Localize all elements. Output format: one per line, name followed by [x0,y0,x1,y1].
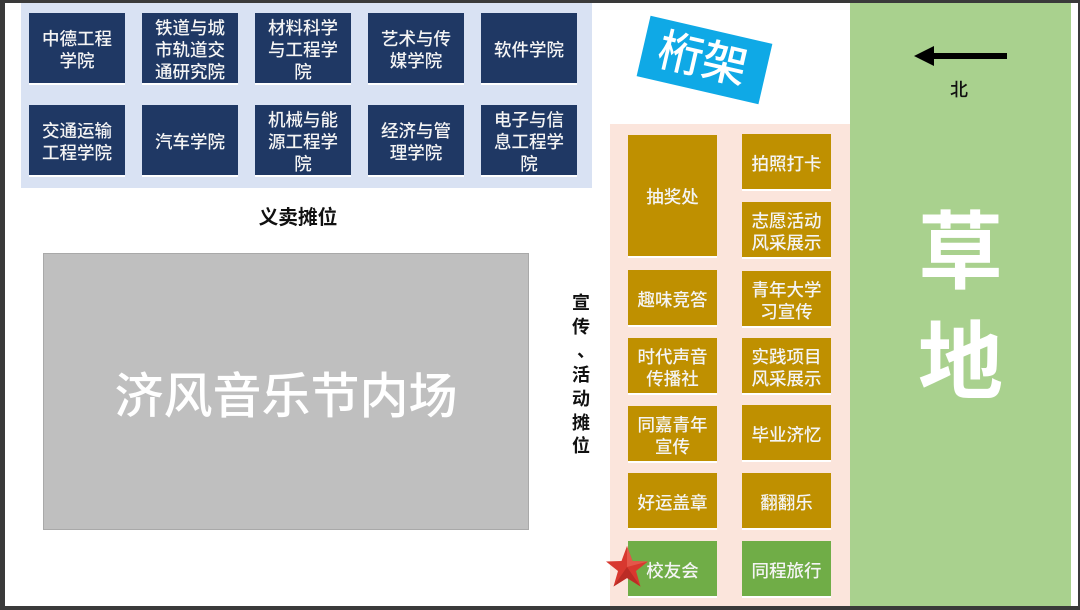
stall: 时代声音传播社 [628,338,717,393]
label: truss: 桁架 [653,24,752,94]
label: lawn [918,206,1003,411]
stall: 拍照打卡 [742,134,831,189]
stall: 材料科学与工程学院: 院 [294,62,312,82]
stall: 汽车学院: 汽车学院 [155,132,225,152]
stall: 志愿活动风采展示: 风采展示 [752,232,822,252]
heading: charity stalls label: 义卖摊位 [259,207,337,229]
stall: 好运盖章: 好运盖章 [638,492,708,512]
panel: music festival inner field [43,253,529,530]
stall: 实践项目风采展示 [742,338,831,393]
stall: 中德工程学院 [29,13,125,83]
stall: 电子与信息工程学院 [481,105,577,175]
label: lawn: 草 [918,206,1003,301]
stall: 电子与信息工程学院: 息工程学 [494,132,564,152]
heading: promotion and activity stalls label [572,293,595,456]
stall: 交通运输工程学院: 工程学院 [42,143,112,163]
stall: 材料科学与工程学院: 与工程学 [268,40,338,60]
stall: 铁道与城市轨道交通研究院 [142,13,238,83]
stall: 软件学院: 软件学院 [494,40,564,60]
stall: 实践项目风采展示: 实践项目 [752,346,822,366]
heading: promotion and activity stalls label: 动 [572,389,590,409]
stall: 实践项目风采展示: 风采展示 [752,368,822,388]
stall: 趣味竞答: 趣味竞答 [638,290,708,310]
heading: promotion and activity stalls label: 活 [572,365,590,385]
stall: 铁道与城市轨道交通研究院: 通研究院 [155,62,225,82]
stall: 艺术与传媒学院 [368,13,464,83]
arrow: north [914,46,1007,66]
stall: 电子与信息工程学院: 电子与信 [494,110,564,130]
stall: 机械与能源工程学院: 院 [294,154,312,174]
stall: 校友会: 校友会 [646,560,699,580]
panel: lawn [850,3,1071,606]
stall: 交通运输工程学院 [29,105,125,175]
stall: 翻翻乐: 翻翻乐 [760,492,813,512]
label: lawn: 地 [918,316,1003,411]
stall: 抽奖处 [628,135,717,256]
stall: 经济与管理学院: 理学院 [390,143,442,163]
stall: 翻翻乐 [742,473,831,528]
heading: promotion and activity stalls label: 、 [577,341,595,361]
heading: promotion and activity stalls label: 宣 [572,293,590,313]
stall: 青年大学习宣传: 青年大学 [752,280,822,300]
stall: 经济与管理学院 [368,105,464,175]
heading: promotion and activity stalls label: 传 [572,317,590,337]
stall: 机械与能源工程学院: 机械与能 [268,110,338,130]
stall: 同程旅行: 同程旅行 [752,560,822,580]
stall: 拍照打卡: 拍照打卡 [752,154,822,174]
stall: 毕业济忆: 毕业济忆 [752,424,822,444]
stall: 同嘉青年宣传: 宣传 [655,436,690,456]
stall: 电子与信息工程学院: 院 [520,154,538,174]
stall: 艺术与传媒学院: 媒学院 [390,51,442,71]
stall: 机械与能源工程学院 [255,105,351,175]
stall: 时代声音传播社: 传播社 [646,368,699,388]
stall: 校友会 [628,541,717,596]
heading: promotion and activity stalls label: 位 [572,436,590,456]
stall: 青年大学习宣传 [742,271,831,326]
stall: 青年大学习宣传: 习宣传 [760,302,813,322]
panel: music festival inner field: 济风音乐节内场 [114,370,458,424]
stall: 抽奖处: 抽奖处 [646,187,699,207]
stall: 同嘉青年宣传 [628,406,717,461]
stall: 铁道与城市轨道交通研究院: 铁道与城 [155,18,225,38]
label: truss [637,16,772,104]
stall: 软件学院 [481,13,577,83]
stall: 经济与管理学院: 经济与管 [381,121,451,141]
label: north: 北 [950,80,968,100]
icon: red star [606,546,648,586]
stall: 汽车学院 [142,105,238,175]
stall: 交通运输工程学院: 交通运输 [42,121,112,141]
stall: 机械与能源工程学院: 源工程学 [268,132,338,152]
stall: 中德工程学院: 学院 [60,51,94,71]
stall: 材料科学与工程学院: 材料科学 [268,18,338,38]
heading: promotion and activity stalls label: 摊 [572,413,590,433]
stall: 材料科学与工程学院 [255,13,351,83]
stall: 好运盖章 [628,473,717,528]
stall: 中德工程学院: 中德工程 [42,29,112,49]
stall: 时代声音传播社: 时代声音 [638,346,708,366]
stall: 同嘉青年宣传: 同嘉青年 [638,414,708,434]
stall: 趣味竞答 [628,270,717,325]
panel: charity stalls background [21,3,592,188]
stall: 毕业济忆 [742,405,831,460]
stall: 志愿活动风采展示 [742,202,831,257]
stall: 艺术与传媒学院: 艺术与传 [381,29,451,49]
stall: 同程旅行 [742,541,831,596]
panel: promotion and activity stalls background [610,124,850,606]
stall: 志愿活动风采展示: 志愿活动 [752,210,822,230]
stall: 铁道与城市轨道交通研究院: 市轨道交 [155,40,225,60]
